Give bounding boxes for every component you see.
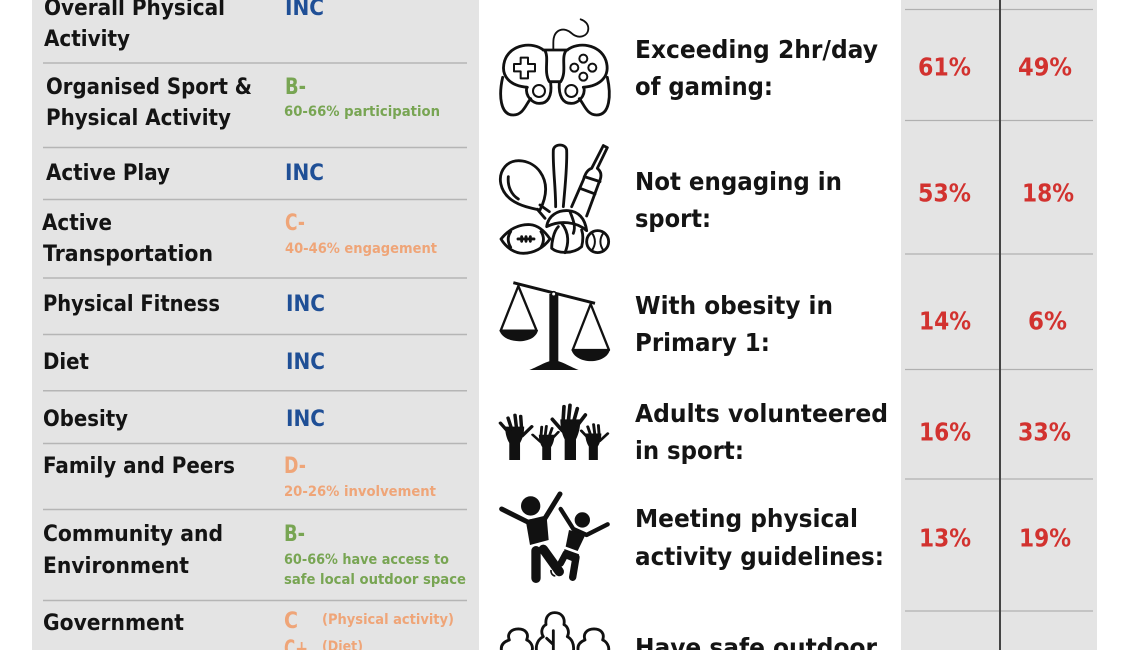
row: community and environment	[43, 521, 466, 588]
row: active transportation: 40-46% engagement	[285, 241, 437, 257]
text: meeting guidelines: Meeting physical	[635, 504, 858, 533]
row: community and environment: Environment	[43, 553, 189, 579]
row: volunteer percentages: 33%	[1018, 418, 1071, 446]
row: organised sport: Organised Sport &	[46, 74, 252, 100]
row: overall physical activity	[44, 0, 324, 52]
row: active transportation	[42, 210, 437, 267]
row: obesity: Obesity	[43, 406, 128, 432]
row: overall physical activity: Activity	[44, 26, 130, 52]
row: organised sport: 60-66% participation	[284, 104, 440, 120]
text: adults volunteered	[635, 399, 888, 465]
row: organised sport: B-	[285, 74, 306, 100]
row: government: C	[284, 608, 298, 634]
icon: raised hands	[500, 405, 608, 460]
icon: game controller	[501, 19, 609, 115]
panel: comparison percentages	[901, 0, 1097, 650]
row: active transportation: Active	[42, 210, 112, 236]
row: family and peers: D-	[284, 453, 306, 479]
row: obesity percentages: 14%	[919, 306, 971, 336]
text: not engaging in sport: Not engaging in	[635, 167, 842, 196]
row: volunteer percentages	[919, 418, 1071, 446]
row: community and environment: 60-66% have access to	[284, 552, 449, 568]
icon: weighing scales	[499, 283, 610, 370]
text: adults volunteered: Adults volunteered	[635, 399, 888, 428]
row: diet: INC	[286, 349, 325, 375]
row: government: (Physical activity)	[322, 612, 454, 628]
row: active transportation: C-	[285, 210, 305, 236]
text: adults volunteered: in sport:	[635, 436, 744, 465]
text: obesity in primary 1	[635, 291, 833, 357]
row: guideline percentages	[919, 524, 1071, 552]
row: family and peers	[43, 453, 436, 500]
row: sport percentages	[918, 178, 1074, 208]
row: obesity percentages: 6%	[1028, 306, 1067, 336]
row: physical fitness: INC	[286, 291, 325, 317]
row: sport percentages: 53%	[918, 178, 971, 208]
row: diet: Diet	[43, 349, 89, 375]
text: not engaging in sport: sport:	[635, 204, 711, 233]
row: active play	[46, 160, 324, 186]
icon: sports equipment	[500, 145, 609, 253]
row: family and peers: 20-26% involvement	[284, 484, 436, 500]
icon: trees	[501, 613, 609, 650]
text: not engaging in sport	[635, 167, 842, 233]
panel: grades table	[32, 0, 479, 650]
text: meeting guidelines: activity guidelines:	[635, 542, 884, 571]
row: family and peers: Family and Peers	[43, 453, 235, 479]
row: active transportation: Transportation	[43, 241, 213, 267]
row: gaming percentages: 49%	[1018, 52, 1072, 82]
row: physical fitness: Physical Fitness	[43, 291, 220, 317]
row: community and environment: safe local outdoor space	[284, 572, 466, 588]
text: obesity in primary 1: With obesity in	[635, 291, 833, 320]
row: community and environment: Community and	[43, 521, 223, 547]
row: government	[43, 608, 454, 650]
row: sport percentages: 18%	[1022, 178, 1074, 208]
row: diet	[43, 349, 325, 375]
row: guideline percentages: 13%	[919, 524, 971, 552]
row: organised sport: Physical Activity	[46, 105, 231, 131]
row: obesity	[43, 406, 325, 432]
row: obesity percentages	[919, 306, 1067, 336]
row: government: Government	[43, 610, 184, 636]
row: gaming percentages: 61%	[918, 52, 971, 82]
row: community and environment: B-	[284, 521, 305, 547]
row: gaming percentages	[918, 52, 1072, 82]
text: exceeding gaming	[635, 35, 878, 101]
row: active play: INC	[285, 160, 324, 186]
row: active play: Active Play	[46, 160, 170, 186]
row: volunteer percentages: 16%	[919, 418, 971, 446]
text: obesity in primary 1: Primary 1:	[635, 328, 770, 357]
icon: jumping children	[502, 494, 608, 578]
row: guideline percentages: 19%	[1019, 524, 1071, 552]
row: organised sport	[46, 74, 440, 131]
text: meeting guidelines	[635, 504, 884, 571]
row: obesity: INC	[286, 406, 325, 432]
text: exceeding gaming: of gaming:	[635, 72, 773, 101]
text: exceeding gaming: Exceeding 2hr/day	[635, 35, 878, 64]
